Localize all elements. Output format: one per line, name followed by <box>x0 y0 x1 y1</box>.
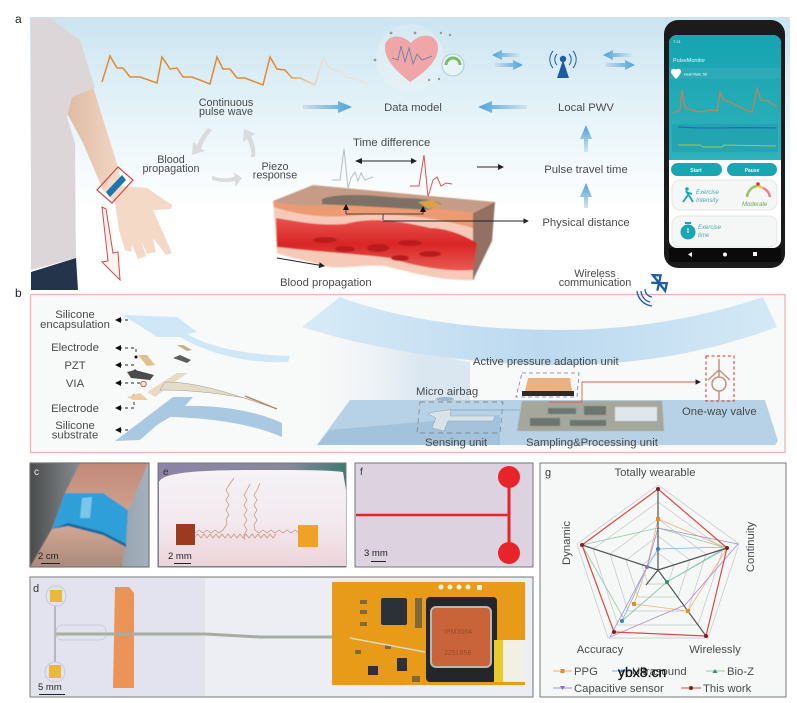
arrow: distance to travel time <box>580 183 592 208</box>
chart: app lower lines <box>672 124 778 152</box>
electrode pads <box>45 586 66 682</box>
channel <box>55 596 350 672</box>
panel b: device structure <box>15 271 785 452</box>
status bar: 7:21 <box>673 39 682 44</box>
scale e: 2 mm <box>168 551 192 562</box>
arrow heads <box>115 317 140 433</box>
icon: one-way valve <box>706 356 734 401</box>
text: PZT: PZT <box>64 360 86 372</box>
heart rate bar <box>669 68 781 79</box>
text: wireless communication: communication <box>559 277 631 289</box>
figure: person with wristband <box>31 18 172 290</box>
text: continuous pulse wave: pulse wave <box>199 106 253 118</box>
button: start <box>671 163 722 176</box>
panel a: pulse wave monitoring workflow <box>15 12 790 290</box>
text: sensing unit: Sensing unit <box>425 437 488 449</box>
button: pause <box>727 163 777 176</box>
label b: b <box>15 286 22 300</box>
text: piezo response: Piezo <box>261 161 289 173</box>
arrow: blood direction <box>277 258 324 266</box>
text: data model: Data model <box>384 102 442 114</box>
icon: wristband highlight box <box>97 167 133 203</box>
arrows: data exchange left <box>492 50 523 70</box>
figure: silicone encapsulation layer <box>123 315 290 362</box>
text: blood propagation: propagation <box>142 163 200 175</box>
text: sampling and processing unit: Sampling&Processing unit <box>526 437 659 449</box>
figure: tissue block <box>273 185 495 280</box>
axis labels: Totally wearable <box>614 467 696 479</box>
legend: Capacitive sensor <box>574 683 664 695</box>
card: exercise time <box>672 216 777 247</box>
axis labels: Continuity <box>745 522 757 572</box>
text: piezo response: response <box>253 170 297 182</box>
leader lines in tissue <box>343 204 426 220</box>
label f: f <box>360 467 363 478</box>
text: silicone encapsulation: Silicone <box>55 309 95 321</box>
arrow: time difference double arrow <box>357 160 416 162</box>
icon: bluetooth wireless <box>637 271 670 306</box>
icon: antenna <box>550 51 576 78</box>
arrows: layer leader lines <box>119 320 143 430</box>
radar points <box>580 487 729 638</box>
text: VIA: VIA <box>66 378 85 390</box>
chart: gray pulse <box>332 149 373 188</box>
card: exercise time: Exercise <box>698 225 722 231</box>
text: silicone substrate: Silicone <box>55 420 95 432</box>
card: exercise intensity: Exercise <box>696 190 720 196</box>
watermark: ybx8.cn <box>618 664 666 680</box>
legend: Ultrasound <box>632 666 687 678</box>
arrow: travel time to PWV <box>580 125 592 152</box>
arrow: physical distance line <box>383 220 528 222</box>
text: electrode top: Electrode <box>51 342 99 354</box>
arrow: valve callout <box>549 382 700 402</box>
figure: pressure pump <box>516 373 579 397</box>
radar series <box>582 489 738 637</box>
scale d: 5 mm <box>38 682 62 693</box>
arrow: red zoom arrow <box>102 207 120 280</box>
app title: PulseMonitor <box>673 58 705 64</box>
arrow: to pulse travel time <box>477 166 503 168</box>
panel b frame <box>30 294 785 452</box>
scale c: 2 cm <box>38 551 59 562</box>
text: silicone encapsulation: encapsulation <box>40 319 110 331</box>
radar grid <box>577 485 739 638</box>
arrows: data exchange right <box>603 50 635 70</box>
text: physical distance: Physical distance <box>542 217 630 229</box>
axis labels <box>561 467 757 656</box>
legend: Bio-Z <box>727 666 754 678</box>
card: exercise time: time <box>698 233 710 239</box>
card: exercise intensity: Intensity <box>696 198 719 204</box>
label g: g <box>545 467 551 479</box>
panel a background <box>30 17 790 290</box>
text: wireless communication: Wireless <box>574 268 616 280</box>
photo f: microfluidic channel <box>355 463 533 567</box>
text: blood propagation: Blood <box>157 154 185 166</box>
label d: d <box>33 583 39 595</box>
text: electrode bottom: Electrode <box>51 403 99 415</box>
text: silicone substrate: substrate <box>52 430 98 442</box>
axis labels: Accuracy <box>577 644 624 656</box>
button: start: Start <box>690 168 702 174</box>
arrow: local PWV to data model <box>478 101 527 113</box>
arrows: gray cycle <box>192 128 256 187</box>
text: local PWV: Local PWV <box>558 102 614 114</box>
phone: pulse monitor app <box>664 20 785 268</box>
photo e: stretchable electrodes <box>158 463 346 567</box>
label c: c <box>34 467 39 478</box>
scale f: 3 mm <box>364 548 388 559</box>
text: continuous pulse wave: Continuous <box>199 97 254 109</box>
circuit board: IPM3064 <box>444 629 472 636</box>
orange strip <box>113 587 134 688</box>
text: time difference: Time difference <box>353 137 430 149</box>
chart: app pulse <box>673 89 777 113</box>
beam gradient <box>302 330 470 445</box>
photo d: full device <box>30 577 533 697</box>
axis labels: Dynamic <box>561 521 573 565</box>
card: exercise intensity: Moderate <box>742 202 768 208</box>
figure: exploded layers <box>127 345 277 409</box>
figure: base plate <box>317 400 778 445</box>
card: exercise intensity <box>672 180 777 210</box>
figure: circuit board <box>517 401 664 431</box>
text: micro airbag: Micro airbag <box>416 386 478 398</box>
figure: sensing unit <box>417 397 520 433</box>
arrow: to data model <box>303 101 352 113</box>
icon: heart data model <box>374 24 464 92</box>
arrow head left <box>355 158 362 164</box>
legend: This work <box>703 683 752 695</box>
figure: silicone substrate layer <box>115 397 282 441</box>
button: pause: Pause <box>745 168 760 174</box>
label a: a <box>15 12 22 26</box>
photo c: wristband <box>30 463 149 567</box>
text: pulse travel time: Pulse travel time <box>544 164 628 176</box>
circuit board: 2251858 <box>444 650 471 657</box>
legend <box>553 666 754 695</box>
legend: PPG <box>574 666 598 678</box>
heart rate bar: Heart Rate: 56 <box>684 72 707 76</box>
label e: e <box>163 467 169 478</box>
chart: continuous pulse wave trace <box>102 56 368 85</box>
text: active pressure adaption unit: Active pressure adaption unit <box>473 356 620 368</box>
circuit board <box>332 582 525 685</box>
axis labels: Wirelessly <box>689 644 741 656</box>
panel g: radar chart <box>540 463 786 697</box>
text: bottom blood propagation: Blood propagation <box>280 277 372 289</box>
text: one-way valve: One-way valve <box>682 406 757 418</box>
figure: top silicone band <box>302 297 777 365</box>
chart: red pulse <box>410 155 452 197</box>
photo c border <box>30 463 149 567</box>
